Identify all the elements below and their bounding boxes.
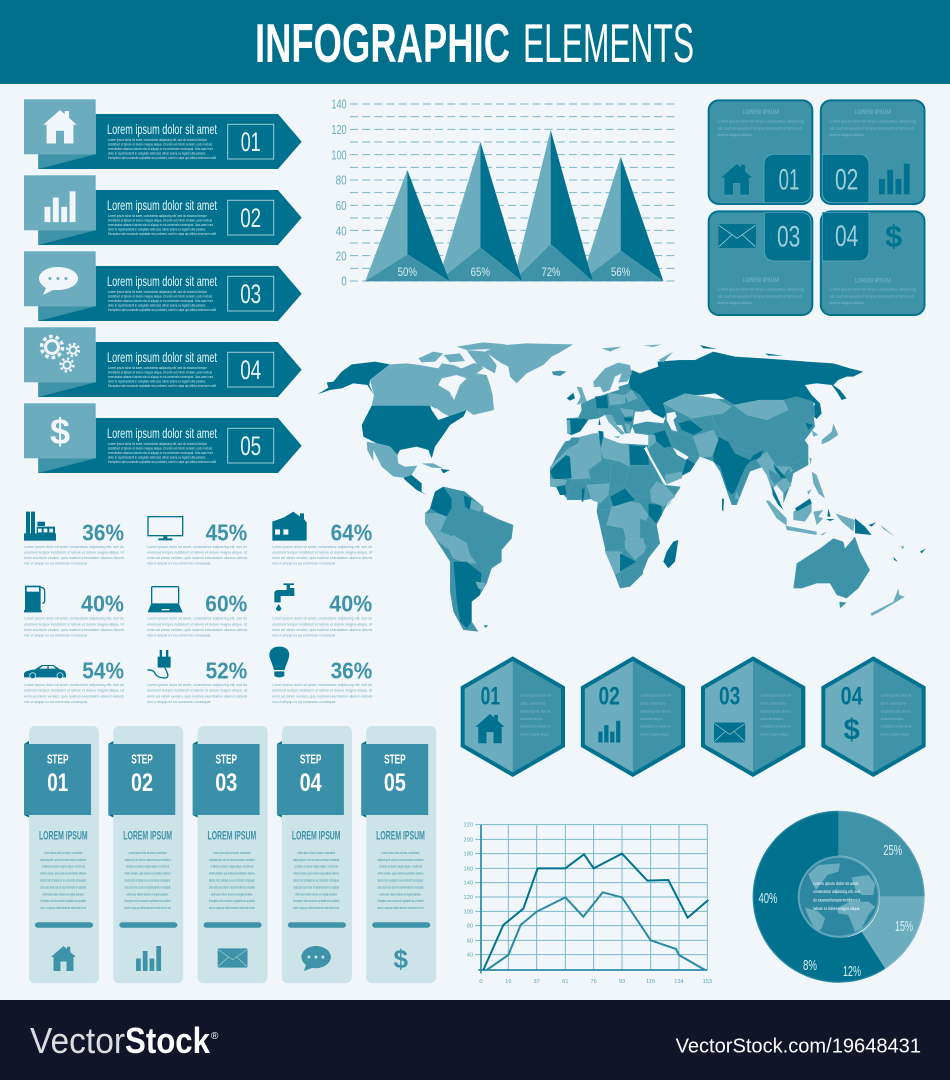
step 05: Lorem ipsum dolor sit amet, consectetur (382, 851, 420, 855)
South America (425, 487, 513, 632)
hexagon 01: incididunt ut labore et (520, 724, 551, 729)
step 04: Duis aute irure dolor in reprehenderit in voluptate (293, 885, 339, 889)
stat 40% tap: eiusmod tempor incididunt ut labore et dolore magna aliqua. Ut (272, 622, 372, 626)
hexagon 03: incididunt ut labore et (760, 724, 792, 729)
globe (799, 857, 879, 937)
footer URL: VectorStock.com/19648431 (676, 1036, 921, 1058)
step 03 (193, 726, 268, 983)
title: ELEMENTS (523, 12, 694, 74)
step 02: laboris nisi ut aliquip ex ea commodo consequat. (125, 879, 171, 883)
step 02: sunt in culpa qui officia deserunt mollit anim id est (125, 906, 171, 910)
hexagon 04: amet, consectetur (881, 701, 907, 706)
arrow row 03: exercitation ullamco laboris nisi ut aliquip ex ea commodo consequat. Duis aute irure (108, 298, 214, 303)
step 03: laboris nisi ut aliquip ex ea commodo consequat. (209, 879, 255, 883)
step 01: ut labore et dolore magna aliqua. Ut enim ad (42, 865, 85, 869)
footer logo: Vector (30, 1020, 125, 1061)
arrow row 02: Excepteur sint occaecat cupidatat non proident, sunt in culpa qui officia deserunt mollit (108, 231, 217, 236)
chart: line graph (464, 823, 712, 985)
arrow row 01: exercitation ullamco laboris nisi ut aliquip ex ea commodo consequat. Duis aute irure (108, 146, 214, 151)
step 01: minim veniam, quis nostrud exercitation ullamco (40, 872, 86, 876)
arrow row 02: 02 (240, 203, 261, 233)
hexagon 03: amet, consectetur (760, 701, 787, 706)
stat 36% factory: eiusmod tempor incididunt ut labore et dolore magna aliqua. Ut (24, 550, 124, 554)
stat 64% house: Lorem ipsum dolor sit amet, consectetur adipiscing elit, sed do (272, 545, 372, 549)
pie labels: 8% (803, 957, 817, 974)
axis labels: 40 (467, 953, 473, 959)
step 04: STEP (300, 751, 322, 766)
arrow row 04: incididunt ut labore et dolore magna aliqua. Ut enim ad minim veniam, quis nostrud (108, 369, 212, 374)
stat 64% house: 64% (331, 520, 372, 546)
stat 54% car (24, 658, 124, 704)
hexagon 04: incididunt ut labore et (881, 724, 912, 729)
card 03: LOREM IPSUM (743, 277, 779, 284)
card 04: 04 (835, 220, 858, 253)
slice 25% (839, 811, 925, 897)
arrow row 02: Lorem ipsum dolor sit amet, consectetur adipiscing elit, sed do eiusmod tempor (108, 213, 207, 218)
stat 36% factory: enim ad minim veniam, quis nostrud exercitation ullamco laboris (24, 556, 124, 560)
step 05: LOREM IPSUM (376, 828, 425, 842)
pyramid 56% (581, 157, 663, 281)
step 05: $ (393, 944, 408, 974)
axis labels: 61 (562, 979, 568, 985)
step 03: minim veniam, quis nostrud exercitation ullamco (209, 872, 255, 876)
step 01: adipiscing elit, sed do eiusmod tempor incididunt (40, 858, 86, 862)
arrow row 03 (24, 251, 302, 321)
stat 54% car: Lorem ipsum dolor sit amet, consectetur adipiscing elit, sed do (24, 683, 124, 687)
stat 54% car: eiusmod tempor incididunt ut labore et dolore magna aliqua. Ut (24, 689, 124, 693)
step 03: STEP (216, 751, 237, 766)
arrow row 02: exercitation ullamco laboris nisi ut aliquip ex ea commodo consequat. Duis aute irure (108, 222, 214, 227)
arrow row 05: Lorem ipsum dolor sit amet (107, 425, 217, 441)
globe: consectetur adipiscing elit, sed (813, 889, 861, 894)
footer bar (0, 1000, 950, 1080)
step 03: Duis aute irure dolor in reprehenderit in voluptate (209, 885, 255, 889)
card 02: LOREM IPSUM (855, 109, 891, 116)
stat 60% laptop: Lorem ipsum dolor sit amet, consectetur adipiscing elit, sed do (147, 617, 247, 621)
arrow row 01: dolor in reprehenderit in voluptate velit esse cillum dolore eu fugiat nulla pariatur. (108, 150, 206, 155)
stat 45% monitor: 45% (206, 520, 247, 546)
stat 36% bulb: eiusmod tempor incididunt ut labore et dolore magna aliqua. Ut (272, 689, 372, 693)
stat 45% monitor: enim ad minim veniam, quis nostrud exercitation ullamco laboris (147, 556, 247, 560)
stat 54% car: enim ad minim veniam, quis nostrud exercitation ullamco laboris (24, 694, 124, 698)
pyramid 56%: 56% (611, 265, 631, 279)
stat 52% plug (147, 650, 247, 704)
stat 40% fuel pump (24, 586, 124, 638)
hexagon 01: adipiscing elit, sed do (520, 709, 551, 714)
arrow row 03: 03 (240, 279, 261, 309)
axis labels: 220 (464, 823, 473, 829)
stat 36% factory: Lorem ipsum dolor sit amet, consectetur adipiscing elit, sed do (24, 545, 124, 549)
slice 15% (862, 897, 925, 969)
step 01: laboris nisi ut aliquip ex ea commodo consequat. (40, 879, 86, 883)
card 01: 01 (779, 163, 799, 196)
Caspian Sea (667, 412, 677, 432)
hexagon 02: Lorem ipsum dolor sit (640, 693, 672, 698)
axis labels: 76 (591, 979, 597, 985)
pyramid 72% (513, 130, 593, 281)
Middle East (632, 422, 665, 433)
stat 52% plug: 52% (206, 658, 247, 684)
Africa base and central countries (550, 433, 680, 588)
step 01: STEP (47, 751, 69, 766)
world map (317, 342, 926, 632)
step 04: laboris nisi ut aliquip ex ea commodo consequat. (293, 879, 339, 883)
hexagon 03: 03 (719, 683, 740, 711)
arrow row 03: Excepteur sint occaecat cupidatat non proident, sunt in culpa qui officia deserunt mollit (108, 307, 217, 312)
axis labels: 120 (331, 123, 347, 137)
step 04: velit esse cillum dolore eu fugiat pariatur. (295, 892, 337, 896)
hexagon 01: eiusmod tempor (520, 716, 543, 721)
arrow row 05: dolor in reprehenderit in voluptate velit esse cillum dolore eu fugiat nulla pariatur. (108, 454, 206, 459)
arrow row 04: Excepteur sint occaecat cupidatat non proident, sunt in culpa qui officia deserunt mollit (108, 383, 217, 388)
arrow row 03: Lorem ipsum dolor sit amet (107, 273, 217, 289)
step 03: ut labore et dolore magna aliqua. Ut enim ad (210, 865, 254, 869)
step 03: sunt in culpa qui officia deserunt mollit anim id est (209, 906, 255, 910)
step 02: STEP (131, 751, 153, 766)
hexagon 03 (703, 659, 803, 775)
hexagon 02 (583, 659, 683, 775)
stat 60% laptop: 60% (205, 591, 247, 617)
arrow row 01: Lorem ipsum dolor sit amet, consectetur adipiscing elit, sed do eiusmod tempor (108, 137, 207, 142)
axis labels: 134 (674, 979, 684, 985)
step 05: laboris nisi ut aliquip ex ea commodo consequat. (378, 879, 424, 883)
step 03: 03 (215, 769, 237, 797)
card 04: LOREM IPSUM (855, 277, 891, 284)
arrow row 05: 05 (240, 431, 261, 461)
map: Asia, East Africa and Oceania (620, 344, 926, 616)
pyramid 72%: 72% (542, 265, 561, 279)
pie labels: 40% (758, 890, 778, 907)
stat 54% car: 54% (82, 658, 124, 684)
step 05: sunt in culpa qui officia deserunt mollit anim id est (378, 906, 424, 910)
step 05: velit esse cillum dolore eu fugiat pariatur. (380, 892, 422, 896)
stat 52% plug: nisi ut aliquip ex ea commodo consequat. (147, 700, 211, 704)
arrow row 03: dolor in reprehenderit in voluptate velit esse cillum dolore eu fugiat nulla pariatur. (108, 302, 206, 307)
arrow row 02 (24, 175, 302, 245)
card 03: elit, sed do eiusmod tempor incididunt ut labore et (717, 293, 803, 298)
hexagon 04 (823, 659, 924, 775)
globe: labore et dolore magna aliqua. (813, 906, 860, 911)
arrow row 05: Lorem ipsum dolor sit amet, consectetur adipiscing elit, sed do eiusmod tempor (108, 441, 207, 446)
hexagon 03: Lorem ipsum dolor sit (760, 693, 792, 698)
step 04: ut labore et dolore magna aliqua. Ut enim ad (295, 865, 338, 869)
arrow row 04: exercitation ullamco laboris nisi ut aliquip ex ea commodo consequat. Duis aute irure (108, 374, 214, 379)
arrow row 01: Lorem ipsum dolor sit amet (107, 121, 217, 137)
hexagon 03: dolore magna aliqua. (760, 731, 790, 736)
axis labels: 80 (336, 174, 347, 188)
step 02: Duis aute irure dolor in reprehenderit in voluptate (125, 885, 171, 889)
stat 60% laptop: eiusmod tempor incididunt ut labore et dolore magna aliqua. Ut (147, 622, 247, 626)
axis labels: 180 (464, 852, 473, 858)
stat 64% house: nisi ut aliquip ex ea commodo consequat. (272, 562, 336, 566)
hexagon 04: $ (844, 713, 860, 746)
step 01: Excepteur sint occaecat cupidatat non proident (40, 899, 86, 903)
stat 64% house (272, 512, 372, 566)
step 02: adipiscing elit, sed do eiusmod tempor incididunt (125, 858, 171, 862)
hexagon 01: dolore magna aliqua. (520, 731, 549, 736)
stat 36% factory (24, 512, 124, 566)
stat 40% fuel pump: 40% (81, 591, 124, 617)
arrow row 03: incididunt ut labore et dolore magna aliqua. Ut enim ad minim veniam, quis nostrud (108, 293, 212, 298)
stat 36% bulb: 36% (331, 658, 372, 684)
stat 36% factory: nisi ut aliquip ex ea commodo consequat. (24, 562, 88, 566)
series 2 (487, 892, 705, 970)
pyramid 50% (365, 170, 449, 281)
axis labels: 100 (331, 148, 347, 162)
axis labels: 60 (467, 938, 473, 944)
hexagon 02: eiusmod tempor (640, 716, 663, 721)
arrow row 01 (24, 99, 302, 169)
arrow row 04: 04 (240, 355, 261, 385)
arrow row 02: dolor in reprehenderit in voluptate velit esse cillum dolore eu fugiat nulla pariatur. (108, 226, 206, 231)
arrow row 04: Lorem ipsum dolor sit amet (107, 349, 217, 365)
stat 40% fuel pump: eiusmod tempor incididunt ut labore et dolore magna aliqua. Ut (24, 622, 124, 626)
axis labels: 80 (467, 924, 473, 930)
step 04: Lorem ipsum dolor sit amet, consectetur (297, 851, 336, 855)
stat 36% bulb: nisi ut aliquip ex ea commodo consequat. (272, 700, 336, 704)
arrow row 05: incididunt ut labore et dolore magna aliqua. Ut enim ad minim veniam, quis nostrud (108, 445, 212, 450)
stat 45% monitor: eiusmod tempor incididunt ut labore et dolore magna aliqua. Ut (147, 550, 247, 554)
stat 40% fuel pump: Lorem ipsum dolor sit amet, consectetur adipiscing elit, sed do (24, 617, 124, 621)
step 05: STEP (384, 751, 406, 766)
series 1 (483, 854, 708, 970)
hexagon 02: incididunt ut labore et (640, 724, 672, 729)
footer logo: Stock (125, 1020, 211, 1061)
card 01: LOREM IPSUM (743, 109, 779, 116)
stat 54% car: nisi ut aliquip ex ea commodo consequat. (24, 700, 88, 704)
axis labels: 20 (336, 249, 347, 263)
step 05: 05 (384, 769, 406, 797)
step 04: 04 (300, 769, 322, 797)
axis labels: 140 (464, 881, 473, 887)
step 02: velit esse cillum dolore eu fugiat pariatur. (127, 892, 169, 896)
stat 40% fuel pump: nisi ut aliquip ex ea commodo consequat. (24, 634, 88, 638)
card 04: Lorem ipsum dolor sit amet, consectetur adipiscing (829, 287, 916, 292)
step 04 (277, 726, 352, 983)
chart: donut pie (753, 811, 925, 983)
card 01: Lorem ipsum dolor sit amet, consectetur adipiscing (717, 118, 804, 123)
stat 40% tap: 40% (329, 591, 372, 617)
arrow row 02: Lorem ipsum dolor sit amet (107, 197, 217, 213)
card 02: elit, sed do eiusmod tempor incididunt ut labore et (829, 125, 915, 130)
axis labels: 140 (331, 98, 347, 112)
step 05: minim veniam, quis nostrud exercitation ullamco (378, 872, 424, 876)
hexagon 01 (463, 659, 563, 775)
stat 36% bulb: enim ad minim veniam, quis nostrud exercitation ullamco laboris (272, 694, 372, 698)
slice 60% dark (753, 811, 886, 983)
stat 52% plug: Lorem ipsum dolor sit amet, consectetur adipiscing elit, sed do (147, 683, 247, 687)
stat 40% tap: enim ad minim veniam, quis nostrud exercitation ullamco laboris (272, 628, 372, 632)
stat 40% tap (272, 583, 372, 638)
axis labels: 0 (479, 979, 483, 985)
step 02: 02 (131, 769, 153, 797)
step 04: LOREM IPSUM (292, 828, 341, 842)
step 02: minim veniam, quis nostrud exercitation ullamco (125, 872, 171, 876)
arrow row 04: dolor in reprehenderit in voluptate velit esse cillum dolore eu fugiat nulla pariatur. (108, 378, 206, 383)
axis labels: 0 (341, 275, 347, 289)
pyramid 65%: 65% (471, 265, 490, 279)
hexagon 02: amet, consectetur (640, 701, 667, 706)
step 01: LOREM IPSUM (39, 828, 88, 842)
stat 36% bulb (269, 647, 372, 704)
card 03: Lorem ipsum dolor sit amet, consectetur adipiscing (717, 287, 804, 292)
panel: numbered arrow list (24, 99, 302, 473)
hexagon 04: Lorem ipsum dolor sit (881, 693, 912, 698)
card 03: 03 (777, 221, 800, 254)
axis labels: 160 (464, 866, 473, 872)
hexagon 04: 04 (841, 683, 863, 711)
step 03: LOREM IPSUM (208, 828, 256, 842)
axis labels: 16 (505, 979, 511, 985)
step 05: Duis aute irure dolor in reprehenderit in voluptate (378, 885, 424, 889)
hexagon 01: 01 (481, 683, 500, 711)
panel: icon statistics grid (24, 512, 372, 704)
arrow row 01: Excepteur sint occaecat cupidatat non proident, sunt in culpa qui officia deserunt mollit (108, 155, 217, 160)
arrow row 01: incididunt ut labore et dolore magna aliqua. Ut enim ad minim veniam, quis nostrud (108, 141, 212, 146)
arrow row 05 (24, 403, 302, 473)
axis labels (331, 98, 347, 289)
step 02: ut labore et dolore magna aliqua. Ut enim ad (126, 865, 169, 869)
arrow row 02: incididunt ut labore et dolore magna aliqua. Ut enim ad minim veniam, quis nostrud (108, 217, 212, 222)
stat 45% monitor: Lorem ipsum dolor sit amet, consectetur adipiscing elit, sed do (147, 545, 247, 549)
step 04: minim veniam, quis nostrud exercitation ullamco (293, 872, 339, 876)
card 04: $ (885, 219, 902, 253)
globe: do eiusmod tempor incididunt ut (813, 898, 861, 902)
arrow row 01: 01 (241, 127, 261, 157)
pie labels (758, 842, 913, 980)
hexagon 02: 02 (598, 683, 620, 711)
map: Europe, North Africa and Middle East (550, 347, 718, 510)
card 04: dolore magna aliqua. (829, 300, 865, 305)
card 02: dolore magna aliqua. (829, 132, 865, 137)
map: Americas and Africa base (317, 342, 680, 632)
axis labels: 100 (464, 909, 473, 915)
hexagon 01: Lorem ipsum dolor sit (520, 693, 551, 698)
panel: hexagon badges (463, 659, 924, 775)
chart: pyramid columns (331, 98, 675, 289)
arrow row 05: $ (50, 411, 70, 452)
stat 36% factory: 36% (82, 520, 124, 546)
step 01: velit esse cillum dolore eu fugiat pariatur. (42, 892, 84, 896)
step 03: adipiscing elit, sed do eiusmod tempor incididunt (209, 858, 255, 862)
stat 40% tap: Lorem ipsum dolor sit amet, consectetur adipiscing elit, sed do (272, 617, 372, 621)
step 01: 01 (47, 769, 68, 797)
stat 64% house: eiusmod tempor incididunt ut labore et dolore magna aliqua. Ut (272, 550, 372, 554)
header banner (0, 0, 950, 84)
stat 60% laptop: enim ad minim veniam, quis nostrud exercitation ullamco laboris (147, 628, 247, 632)
step 05: ut labore et dolore magna aliqua. Ut enim ad (379, 865, 422, 869)
axis labels: 37 (534, 979, 540, 985)
step 04: adipiscing elit, sed do eiusmod tempor incididunt (293, 858, 339, 862)
step 03: Excepteur sint occaecat cupidatat non proident (209, 899, 255, 903)
stat 52% plug: eiusmod tempor incididunt ut labore et dolore magna aliqua. Ut (147, 689, 247, 693)
card 01: dolore magna aliqua. (717, 132, 753, 137)
axis labels (464, 823, 712, 985)
axis labels: 60 (336, 199, 347, 213)
step 05: Excepteur sint occaecat cupidatat non proident (378, 899, 424, 903)
arrow row 04: Lorem ipsum dolor sit amet, consectetur adipiscing elit, sed do eiusmod tempor (108, 365, 207, 370)
step 05: adipiscing elit, sed do eiusmod tempor incididunt (378, 858, 424, 862)
panel: step columns (24, 726, 436, 983)
step 01: Duis aute irure dolor in reprehenderit in voluptate (40, 885, 86, 889)
stat 60% laptop: nisi ut aliquip ex ea commodo consequat. (147, 634, 211, 638)
step 03: velit esse cillum dolore eu fugiat pariatur. (211, 892, 253, 896)
hexagon 01: amet, consectetur (520, 701, 547, 706)
arrow row 05: exercitation ullamco laboris nisi ut aliquip ex ea commodo consequat. Duis aute irure (108, 450, 214, 455)
hexagon 03: eiusmod tempor (760, 716, 784, 721)
North Africa (563, 437, 580, 450)
title: INFOGRAPHIC (255, 12, 510, 74)
axis labels: 115 (646, 979, 655, 985)
step 02: Lorem ipsum dolor sit amet, consectetur (129, 851, 167, 855)
step 01 (24, 726, 99, 983)
step 01: sunt in culpa qui officia deserunt mollit anim id est (40, 906, 86, 910)
card 03: dolore magna aliqua. (717, 300, 753, 305)
stat 52% plug: enim ad minim veniam, quis nostrud exercitation ullamco laboris (147, 694, 247, 698)
pie labels: 12% (843, 963, 861, 980)
card 02: 02 (835, 163, 858, 196)
stat 60% laptop (147, 587, 247, 638)
stat 45% monitor (147, 517, 247, 566)
card 01 (709, 100, 812, 204)
step 02 (108, 726, 183, 983)
stat 36% bulb: Lorem ipsum dolor sit amet, consectetur adipiscing elit, sed do (272, 683, 372, 687)
stat 45% monitor: nisi ut aliquip ex ea commodo consequat. (147, 562, 211, 566)
card 04: elit, sed do eiusmod tempor incididunt ut labore et (829, 293, 915, 298)
step 04: sunt in culpa qui officia deserunt mollit anim id est (293, 906, 339, 910)
card 02: Lorem ipsum dolor sit amet, consectetur adipiscing (829, 118, 916, 123)
step 02: Excepteur sint occaecat cupidatat non proident (125, 899, 171, 903)
step 04: Excepteur sint occaecat cupidatat non proident (293, 899, 339, 903)
axis labels: 120 (464, 895, 473, 901)
arrow row 03: Lorem ipsum dolor sit amet, consectetur adipiscing elit, sed do eiusmod tempor (108, 289, 207, 294)
step 05 (361, 726, 436, 983)
arrow row 05: Excepteur sint occaecat cupidatat non proident, sunt in culpa qui officia deserunt mollit (108, 459, 217, 464)
hexagon 03: adipiscing elit, sed do (760, 709, 792, 714)
hexagon 04: eiusmod tempor (881, 716, 904, 721)
step 02: LOREM IPSUM (123, 828, 172, 842)
hexagon 02: adipiscing elit, sed do (640, 709, 671, 714)
stat 40% tap: nisi ut aliquip ex ea commodo consequat. (272, 634, 336, 638)
step 01: Lorem ipsum dolor sit amet, consectetur (44, 851, 83, 855)
stat 64% house: enim ad minim veniam, quis nostrud exercitation ullamco laboris (272, 556, 372, 560)
footer logo: ® (211, 1031, 219, 1042)
axis labels: 40 (336, 224, 347, 238)
axis labels: 200 (464, 837, 473, 843)
pie labels: 15% (895, 918, 913, 935)
card 03 (709, 211, 812, 315)
pie labels: 25% (883, 842, 902, 859)
hexagon 04: dolore magna aliqua. (881, 731, 910, 736)
hexagon 04: adipiscing elit, sed do (881, 709, 912, 714)
card 01: elit, sed do eiusmod tempor incididunt ut labore et (717, 125, 803, 130)
pyramid 50%: 50% (398, 265, 417, 279)
step 03: Lorem ipsum dolor sit amet, consectetur (213, 851, 252, 855)
panel: four quadrant cards (709, 100, 924, 315)
stat 40% fuel pump: enim ad minim veniam, quis nostrud exercitation ullamco laboris (24, 628, 124, 632)
hexagon 02: dolore magna aliqua. (640, 731, 669, 736)
card 02 (821, 100, 924, 204)
axis labels: 153 (703, 979, 712, 985)
pyramid 65% (438, 142, 522, 281)
arrow row 04 (24, 327, 302, 397)
card 04 (821, 211, 924, 315)
axis labels: 93 (619, 979, 625, 985)
footer logo (30, 1020, 219, 1061)
globe: Lorem ipsum dolor sit amet, (813, 881, 859, 886)
